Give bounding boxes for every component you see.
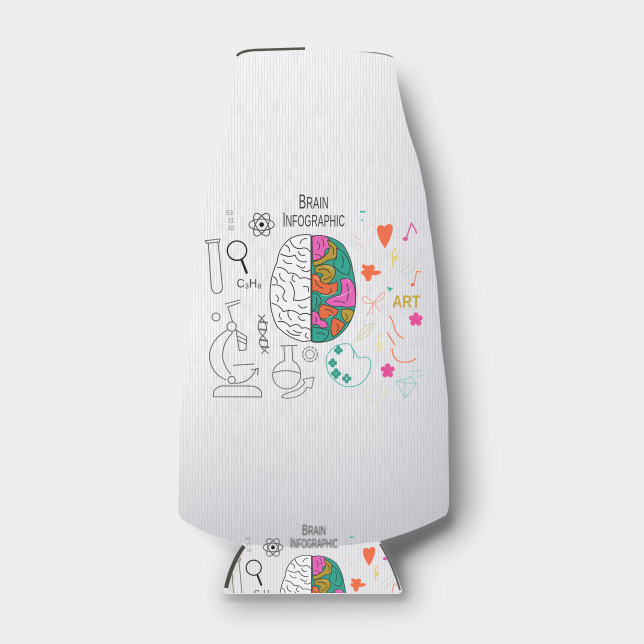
flap left lining xyxy=(229,553,243,592)
icon: pink flower lower xyxy=(381,363,395,377)
pink dashes xyxy=(353,225,399,254)
icon: leaf gold xyxy=(357,323,374,341)
flap left hem xyxy=(226,546,244,588)
icon: leaf outline xyxy=(398,248,422,277)
art doodles lower xyxy=(326,291,425,402)
science doodles upper xyxy=(205,211,274,293)
science doodles lower xyxy=(209,300,317,398)
formula text: 32 xyxy=(227,225,235,232)
brain lobe: gold centre xyxy=(315,264,335,284)
icon: test tube xyxy=(205,239,222,293)
repeated title xyxy=(290,522,338,552)
bag body xyxy=(170,45,460,555)
icon: palette scroll xyxy=(363,386,386,402)
icon: atom xyxy=(249,211,274,238)
formula text: 53 xyxy=(226,210,234,217)
icon: heart xyxy=(377,224,393,248)
icon: flask xyxy=(273,345,301,389)
brain fold lines xyxy=(315,238,348,335)
ART label: ART xyxy=(392,291,420,311)
icon: treble clef gold xyxy=(392,248,397,267)
brain lobe: gold xyxy=(313,240,339,266)
icon: diamond xyxy=(396,370,425,398)
repeated title: BRAIN xyxy=(302,522,326,539)
icon: pink flower xyxy=(409,312,423,326)
brain lobe: teal lower left xyxy=(312,293,322,311)
icon: music note pink xyxy=(407,223,417,237)
infographic print xyxy=(205,191,425,402)
title xyxy=(283,191,345,232)
brain lobe: pink xyxy=(312,235,330,260)
brain lobe: teal xyxy=(334,248,351,275)
brain: left hemisphere xyxy=(270,235,311,342)
brain lobe: teal bottom xyxy=(312,327,329,342)
icon: magnifying glass xyxy=(227,241,247,273)
art doodles upper xyxy=(353,212,422,292)
icon: curved arrow xyxy=(281,377,314,398)
brain lobe: orange middle xyxy=(319,304,338,319)
icon: microscope xyxy=(209,300,262,397)
icon: palette xyxy=(326,344,371,387)
brain lobe: pink middle xyxy=(325,278,356,307)
note head pink xyxy=(403,237,408,241)
teal marks xyxy=(360,212,365,220)
icon: palette brush xyxy=(351,345,354,358)
icon: orange flower splat xyxy=(361,264,381,281)
title: BRAIN xyxy=(299,191,329,213)
formula text xyxy=(226,210,262,290)
bag top hem xyxy=(237,48,393,58)
title: INFOGRAPHIC xyxy=(283,210,345,232)
brain highlights xyxy=(315,267,352,318)
bottom flap of bag xyxy=(223,540,402,594)
icon: bow xyxy=(363,292,384,316)
formula text: 21 xyxy=(227,218,235,225)
palette clovers xyxy=(328,346,351,383)
note head orange xyxy=(411,283,415,286)
brain: right hemisphere xyxy=(312,235,356,342)
icon: note orange xyxy=(414,271,422,284)
brain lobe: orange lower xyxy=(331,317,345,337)
brain lobe: orange xyxy=(312,274,338,295)
icon: clef yellow xyxy=(377,333,382,352)
repeated title: INFOGRAPHIC xyxy=(290,535,338,552)
teal triangle xyxy=(387,287,393,292)
repeated print on flap xyxy=(232,536,398,593)
icon: orange squiggles xyxy=(387,316,416,362)
formula text: C₃H₈ xyxy=(237,276,262,290)
brain lobe: pink lower xyxy=(312,311,328,328)
bag shadow xyxy=(178,70,470,606)
icon: DNA helix xyxy=(258,315,269,353)
icon: gear xyxy=(303,347,317,362)
flap right hem xyxy=(380,544,400,590)
brain lobe: gold lower xyxy=(341,309,354,323)
